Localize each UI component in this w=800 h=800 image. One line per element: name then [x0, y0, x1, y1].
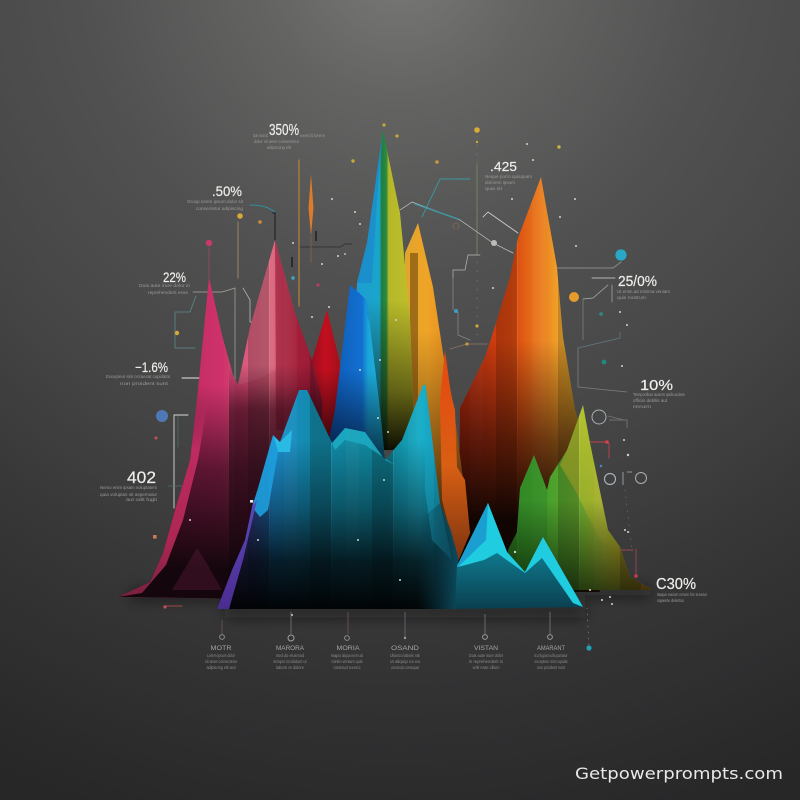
peak group: front right cyan mountain — [418, 503, 583, 609]
watermark: Getpowerprompts.com — [575, 764, 783, 783]
stat: 425: dolorem ipsum — [485, 180, 515, 185]
peak group: pink — [118, 240, 322, 598]
bottom label 5 — [469, 614, 504, 670]
stat: 402: 402 — [127, 468, 156, 487]
stat: 425: Neque porro quisquam — [485, 174, 532, 179]
icon: ring cluster — [592, 410, 646, 485]
bottom label 2: Sed do eiusmod — [276, 653, 305, 658]
chart ground shadow — [130, 587, 650, 618]
bottom label 3: Magna aliqua enim ad — [331, 653, 364, 658]
bottom label 4: ut aliquip ex ea — [390, 659, 421, 664]
stat: 10% — [633, 377, 685, 409]
bottom label 6: Eu fugiat nulla pariatur — [534, 653, 568, 658]
bottom label 1: Lorem ipsum dolor — [207, 653, 235, 658]
bottom label 2: tempor incididunt ut — [274, 659, 307, 664]
stat: -1.6%: Excepteur sint occaecat cupidatat — [106, 374, 171, 379]
stat: -1.6%: non proident sunt — [120, 381, 169, 386]
stat: C30%: C30% — [656, 576, 696, 593]
stat: 25/0%: Ut enim ad minima veniam — [617, 289, 670, 294]
stat: -1.6% — [106, 359, 171, 386]
bottom label 1: MOTR — [210, 646, 232, 652]
bottom label 2: labore et dolore — [276, 665, 305, 670]
stat: 22%: Duis aute irure dolor in — [139, 283, 191, 288]
bottom label 3 — [331, 612, 364, 670]
bottom label 6: AMARANT — [537, 646, 565, 652]
stat: 50%: .50% — [212, 183, 242, 199]
stat: C30%: Itaque earum rerum hic tenetur — [657, 592, 707, 597]
dots and particles — [153, 123, 638, 651]
stat: 425 — [485, 159, 532, 191]
stat: 350%: Quis nostrud — [253, 133, 268, 138]
stat: 22%: reprehenderit esse — [148, 290, 189, 295]
bottom label 5: VISTAN — [474, 646, 498, 652]
bottom label 4 — [390, 612, 421, 670]
bottom label 4: OSAND — [391, 646, 420, 652]
stat: 50%: Group lorem ipsum dolor sit — [187, 199, 244, 204]
bottom label 3: nostrud exerci — [334, 665, 361, 670]
stat: -1.6%: −1.6% — [135, 359, 168, 375]
bottom label 1: sit amet consectetur — [205, 659, 238, 664]
bottom label 3: minim veniam quis — [332, 659, 362, 664]
bottom label 4: Ullamco laboris nisi — [390, 653, 420, 658]
peak group: blue — [330, 285, 385, 460]
bottom label 3: MORIA — [336, 646, 360, 652]
bottom label 4: commodo consequat — [391, 665, 420, 670]
peak group: red — [308, 310, 342, 442]
stat: 350% — [253, 122, 325, 150]
stat: 10%: Temporibus autem quibusdam — [633, 392, 685, 397]
stat: 402 — [100, 468, 158, 502]
leader lines and connectors — [164, 136, 636, 648]
stat: 10%: rerum — [633, 404, 652, 409]
stat: C30% — [656, 576, 707, 603]
peak group: orange — [458, 177, 600, 592]
bottom label 6: non proident sunt — [537, 665, 566, 670]
stat: 402: aut odit fugit — [126, 497, 158, 502]
stat: 350%: 350% — [269, 122, 299, 139]
stat: 22% — [139, 269, 191, 295]
stat: 350%: exercit lorem — [300, 133, 325, 138]
stat: 425: quia sit — [485, 186, 503, 191]
peak group: center spike — [356, 130, 414, 450]
bottom label 1 — [205, 620, 238, 670]
bottom label 2: MARORA — [276, 646, 304, 652]
stat: 25/0% — [617, 273, 670, 300]
bottom label 5: in reprehenderit in — [469, 659, 504, 664]
bottom label 5: Duis aute irure dolor — [469, 653, 504, 658]
bottom label 1: adipiscing elit sed — [206, 665, 236, 670]
peak group: gold — [405, 223, 470, 542]
stat: C30%: sapiente delectus — [657, 598, 685, 603]
peak group: front teal mountain — [215, 380, 481, 613]
peak group: green and yellow — [508, 405, 653, 590]
bottom label 6 — [534, 612, 568, 670]
stat: 10%: officiis debitis aut — [633, 398, 668, 403]
icon: orange spindle marker — [308, 174, 314, 236]
stat: 25/0%: quis nostrum — [617, 295, 646, 300]
peak: orange-red band — [440, 350, 470, 562]
stat: 10%: 10% — [640, 377, 673, 394]
stat: 50%: consectetur adipiscing — [196, 206, 244, 211]
stat: 50% — [187, 183, 244, 211]
stat: 425: .425 — [490, 159, 517, 174]
stat: 350%: dolor sit amet consectetur — [254, 139, 299, 144]
bottom label 5: velit esse cillum — [472, 665, 500, 670]
bottom label 6: excepteur sint cupidat — [534, 659, 568, 664]
stat: 402: quia voluptas sit aspernatur — [100, 492, 158, 497]
stat: 25/0%: 25/0% — [618, 273, 657, 290]
stat: 350%: adipiscing elit — [267, 145, 292, 150]
stat: 402: Nemo enim ipsam voluptatem — [100, 485, 157, 490]
bottom label 2 — [274, 612, 307, 670]
stat: 22%: 22% — [163, 269, 186, 285]
